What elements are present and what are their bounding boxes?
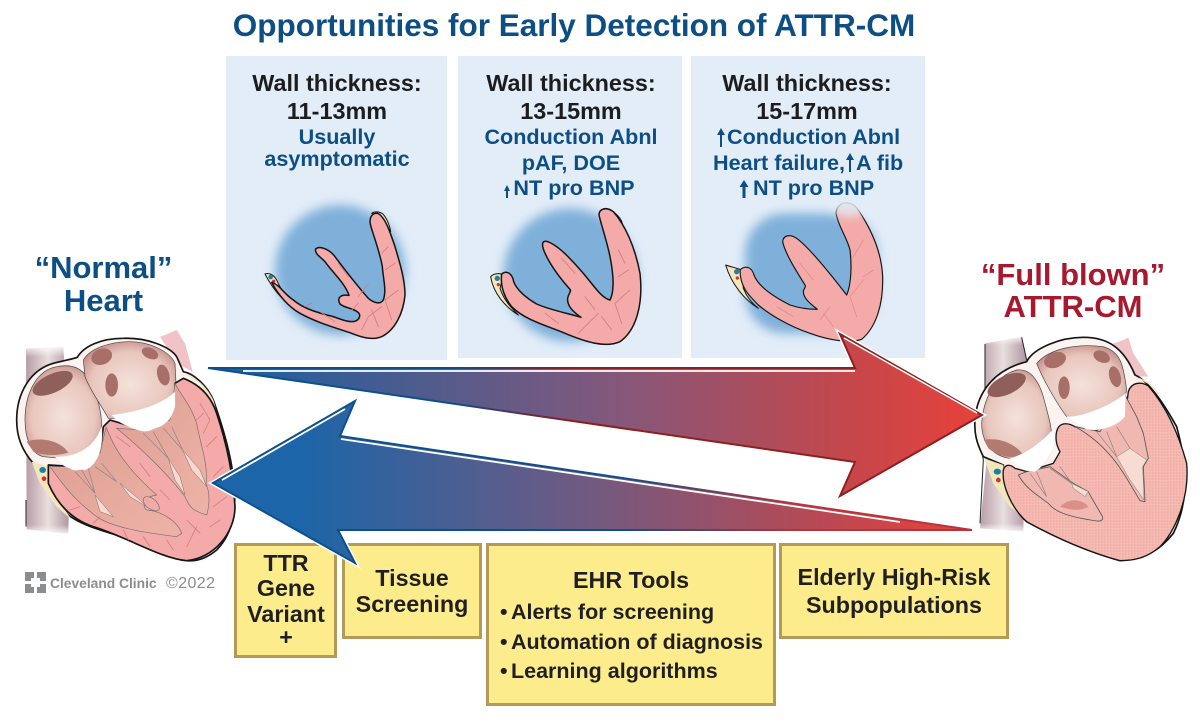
title: Opportunities for Early Detection of ATTR-CM [233, 7, 915, 43]
box: EHR tools [488, 544, 774, 704]
symptoms text: conduction abnormalities, pAF, DOE, NT pro BNP: Conduction Abnl [484, 124, 658, 149]
box: elderly high-risk subpopulations: Elderly High-Risk [798, 564, 990, 590]
logo: Cleveland Clinic copyright [25, 572, 215, 593]
symptoms text: conduction abnormalities, pAF, DOE, NT pro BNP: pAF, DOE [522, 150, 620, 175]
symptoms text: conduction, heart failure, A fib, NT pro BNP: A fib [856, 150, 903, 175]
heading: wall thickness 13-15mm: 13-15mm [520, 98, 622, 124]
bullet list: EHR tools: • [500, 600, 508, 624]
arrow: progression from normal heart to full blown ATTR-CM [208, 334, 982, 496]
illustration: full blown ATTR-CM heart cross-section [975, 335, 1187, 561]
box: elderly high-risk subpopulations [780, 544, 1008, 638]
illustration: thin ventricle section [265, 205, 405, 338]
box: TTR gene variant: Variant [247, 601, 325, 627]
bullet list: EHR tools: • [500, 659, 508, 683]
symptoms text: conduction, heart failure, A fib, NT pro BNP: NT pro BNP [753, 175, 874, 200]
illustration: severely thickened ventricle section [726, 191, 883, 341]
symptoms text: usually asymptomatic: Usually [299, 124, 375, 149]
icon: Cleveland Clinic mark [25, 572, 46, 593]
heading: wall thickness 11-13mm: Wall thickness: [252, 70, 422, 96]
bullet list: EHR tools: Learning algorithms [511, 659, 718, 683]
icon: small up arrow [504, 185, 510, 198]
box: elderly high-risk subpopulations: Subpopulations [806, 592, 982, 618]
box: tissue screening: Tissue [375, 565, 449, 591]
panel: wall thickness 11-13mm [226, 56, 447, 360]
heading: EHR tools: EHR Tools [573, 567, 689, 593]
heading: wall thickness 13-15mm: Wall thickness: [486, 70, 656, 96]
heading: wall thickness 15-17mm: 15-17mm [756, 98, 858, 124]
symptoms text: conduction, heart failure, A fib, NT pro BNP: Conduction Abnl [727, 124, 900, 149]
box: TTR gene variant: Gene [257, 575, 315, 601]
bullet list: EHR tools: Alerts for screening [511, 600, 714, 624]
heading: normal heart: Heart [64, 283, 143, 318]
illustration: moderately thickened ventricle section [491, 208, 641, 344]
box: TTR gene variant: TTR [263, 550, 309, 576]
symptoms text: conduction abnormalities, pAF, DOE, NT pro BNP: NT pro BNP [513, 175, 635, 200]
symptoms text: usually asymptomatic: asymptomatic [264, 146, 410, 171]
heading: full blown ATTR-CM: ATTR-CM [1004, 289, 1142, 324]
icon: up arrows [717, 128, 854, 198]
box: tissue screening [344, 544, 480, 638]
box: TTR gene variant [236, 544, 336, 656]
heading: normal heart: “Normal” [35, 250, 172, 285]
box: tissue screening: Screening [356, 591, 468, 617]
heading: wall thickness 15-17mm: Wall thickness: [722, 70, 892, 96]
box: TTR gene variant: + [279, 624, 293, 650]
text: Cleveland Clinic: Cleveland Clinic [50, 576, 157, 591]
heading: wall thickness 11-13mm: 11-13mm [287, 98, 387, 124]
bullet list: EHR tools [500, 600, 763, 683]
arrow: early detection back toward normal heart [213, 401, 972, 563]
panel: wall thickness 13-15mm [458, 56, 682, 358]
panel: wall thickness 15-17mm [691, 56, 925, 358]
bullet list: EHR tools: • [500, 630, 508, 654]
illustration: normal heart cross-section [17, 330, 235, 561]
heading: full blown ATTR-CM: “Full blown” [981, 257, 1165, 292]
bullet list: EHR tools: Automation of diagnosis [511, 630, 763, 654]
text: copyright 2022: ©2022 [166, 575, 215, 592]
symptoms text: conduction, heart failure, A fib, NT pro BNP: Heart failure, [713, 150, 845, 175]
